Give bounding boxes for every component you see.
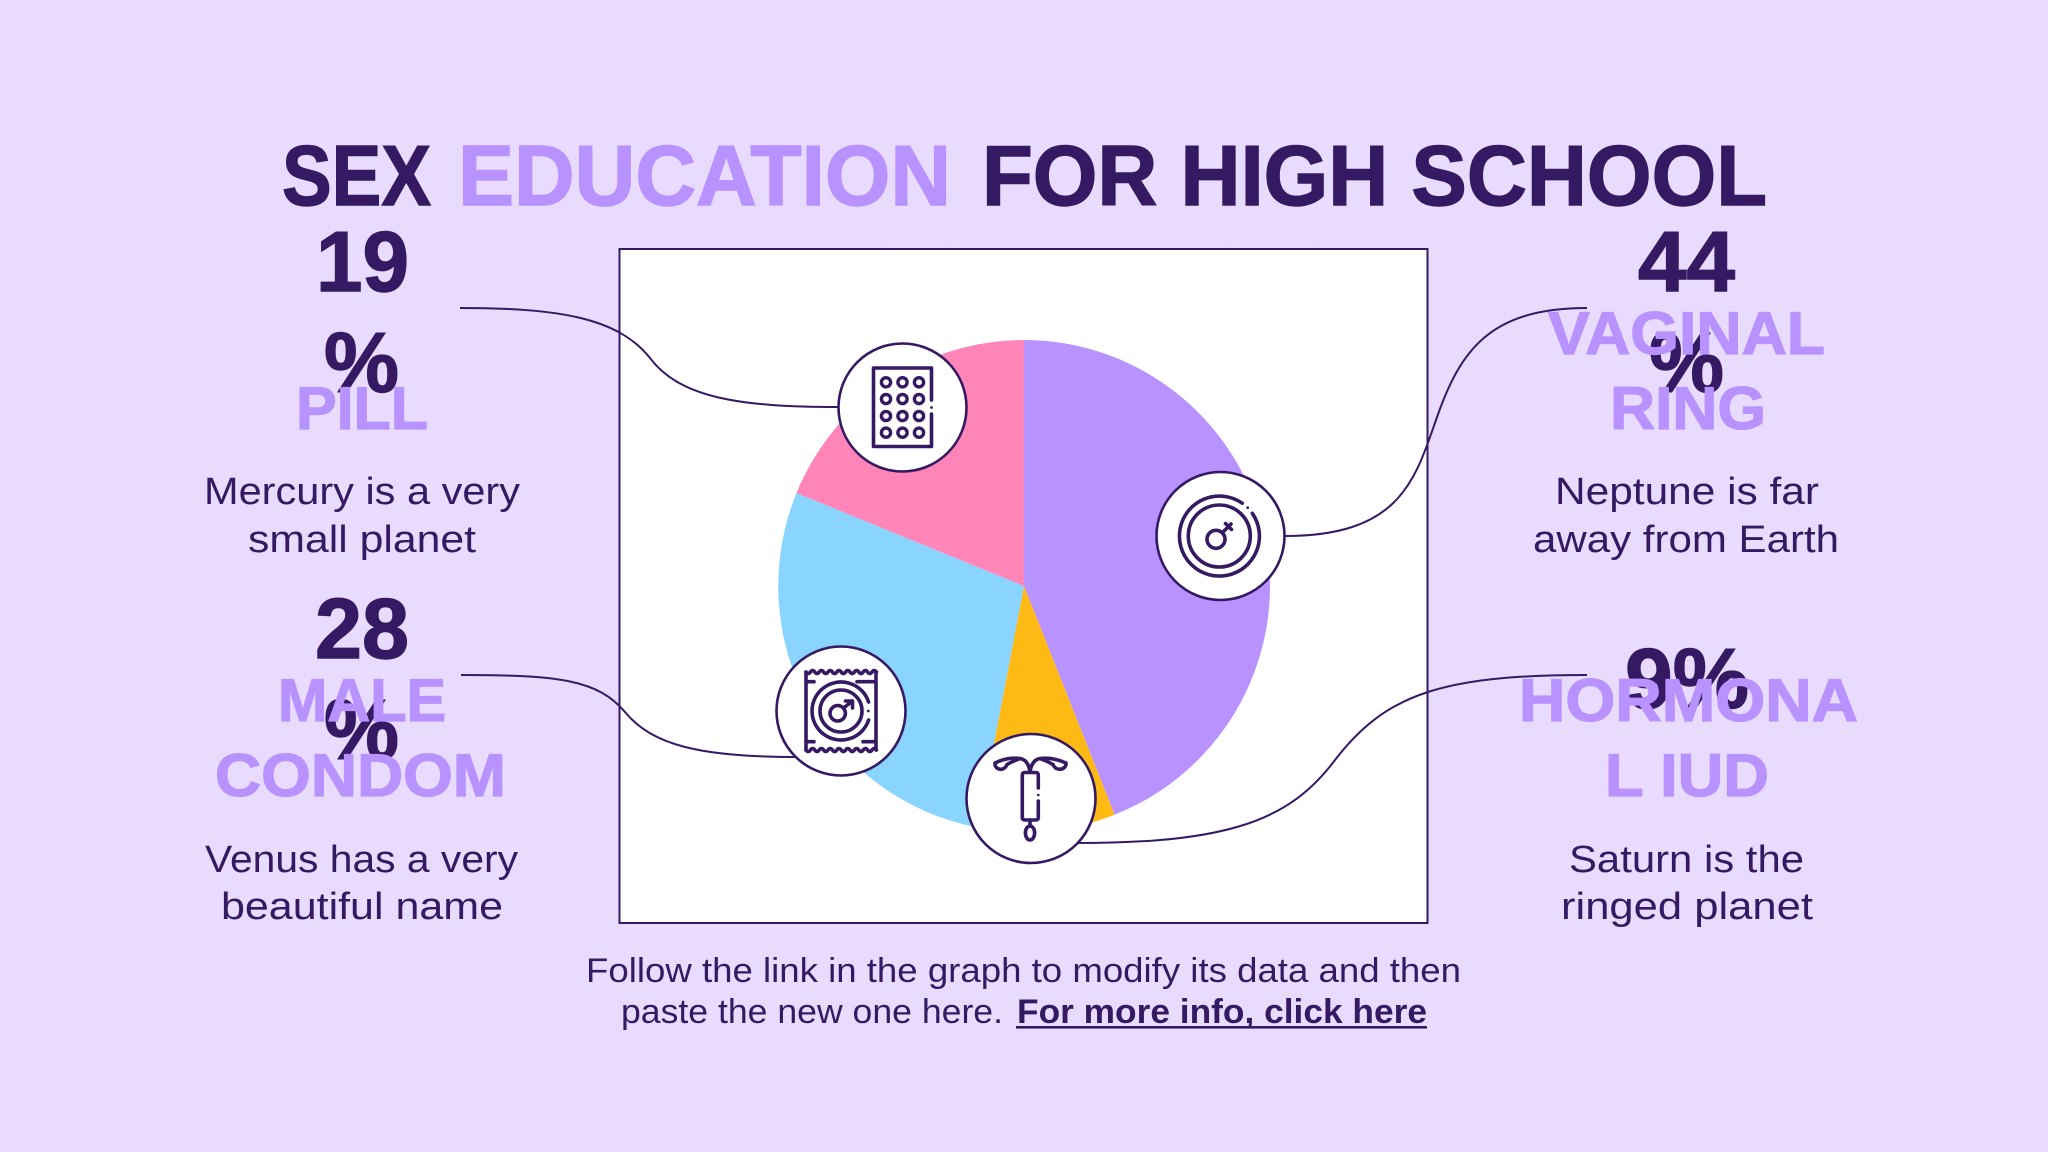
- stat: 19%: %: [324, 316, 399, 411]
- text: male condom description: Venus has a very: [205, 839, 518, 881]
- text: pill description: Mercury is a very: [204, 471, 520, 513]
- label: vaginal ring: RING: [1610, 375, 1766, 442]
- label: hormonal IUD: HORMONA: [1519, 667, 1858, 734]
- text: pill description: small planet: [248, 519, 476, 561]
- slice: vaginal ring 44%: [1024, 340, 1270, 815]
- icon: vaginal ring: [1156, 472, 1284, 600]
- stat: 9%: 9%: [1625, 632, 1749, 727]
- slice: male condom 28%: [778, 493, 1024, 828]
- stat: 44%: %: [1649, 316, 1724, 411]
- title: SEX: [282, 129, 431, 224]
- text: chart caption: paste the new one here.: [621, 993, 1003, 1031]
- stat: 28%: [315, 582, 409, 778]
- connector: pill: [460, 308, 838, 407]
- text: hormonal IUD description: [1561, 839, 1813, 928]
- title: EDUCATION: [458, 129, 951, 224]
- text: male condom description: beautiful name: [221, 886, 503, 928]
- text: chart caption: For more info, click here: [1017, 993, 1427, 1031]
- text: vaginal ring description: away from Earth: [1533, 519, 1839, 561]
- stat: 44%: [1638, 215, 1735, 411]
- panel: chart frame: [620, 249, 1428, 923]
- text: hormonal IUD description: Saturn is the: [1569, 839, 1804, 881]
- connector: male condom: [461, 675, 796, 757]
- slice: pill 19%: [796, 340, 1024, 586]
- label: vaginal ring: [1548, 300, 1825, 442]
- icon: pill blister: [838, 344, 966, 472]
- icon: condom packet: [776, 646, 906, 776]
- text: male condom description: [205, 839, 518, 928]
- title: FOR HIGH SCHOOL: [982, 129, 1767, 224]
- hidden subtitle behind chart panel: TYPES OF METHODS: [702, 237, 1336, 306]
- icon: IUD: [966, 734, 1096, 863]
- label: pill: PILL: [296, 375, 428, 442]
- label: hormonal IUD: [1519, 667, 1858, 809]
- label: male condom: CONDOM: [215, 742, 506, 809]
- text: chart caption: [586, 952, 1461, 1031]
- stat: 28%: 28: [315, 582, 409, 677]
- label: male condom: [215, 667, 506, 809]
- slice: hormonal IUD 9%: [978, 586, 1115, 832]
- text: hormonal IUD description: ringed planet: [1561, 886, 1813, 928]
- stat: 28%: %: [324, 683, 399, 778]
- title: [282, 129, 1767, 224]
- connector: hormonal IUD: [1078, 675, 1587, 843]
- stat: 19%: [316, 215, 409, 411]
- pie chart: [778, 340, 1270, 832]
- stat: 44%: 44: [1638, 215, 1735, 310]
- text: pill description: [204, 471, 520, 561]
- stat: 19%: 19: [316, 215, 409, 310]
- label: vaginal ring: VAGINAL: [1548, 300, 1825, 367]
- label: male condom: MALE: [278, 667, 446, 734]
- connector: vaginal ring: [1285, 308, 1587, 536]
- label: hormonal IUD: L IUD: [1605, 742, 1769, 809]
- text: vaginal ring description: Neptune is far: [1555, 471, 1819, 513]
- text: vaginal ring description: [1533, 471, 1839, 561]
- text: chart caption: Follow the link in the graph to modify its data and then: [586, 952, 1461, 990]
